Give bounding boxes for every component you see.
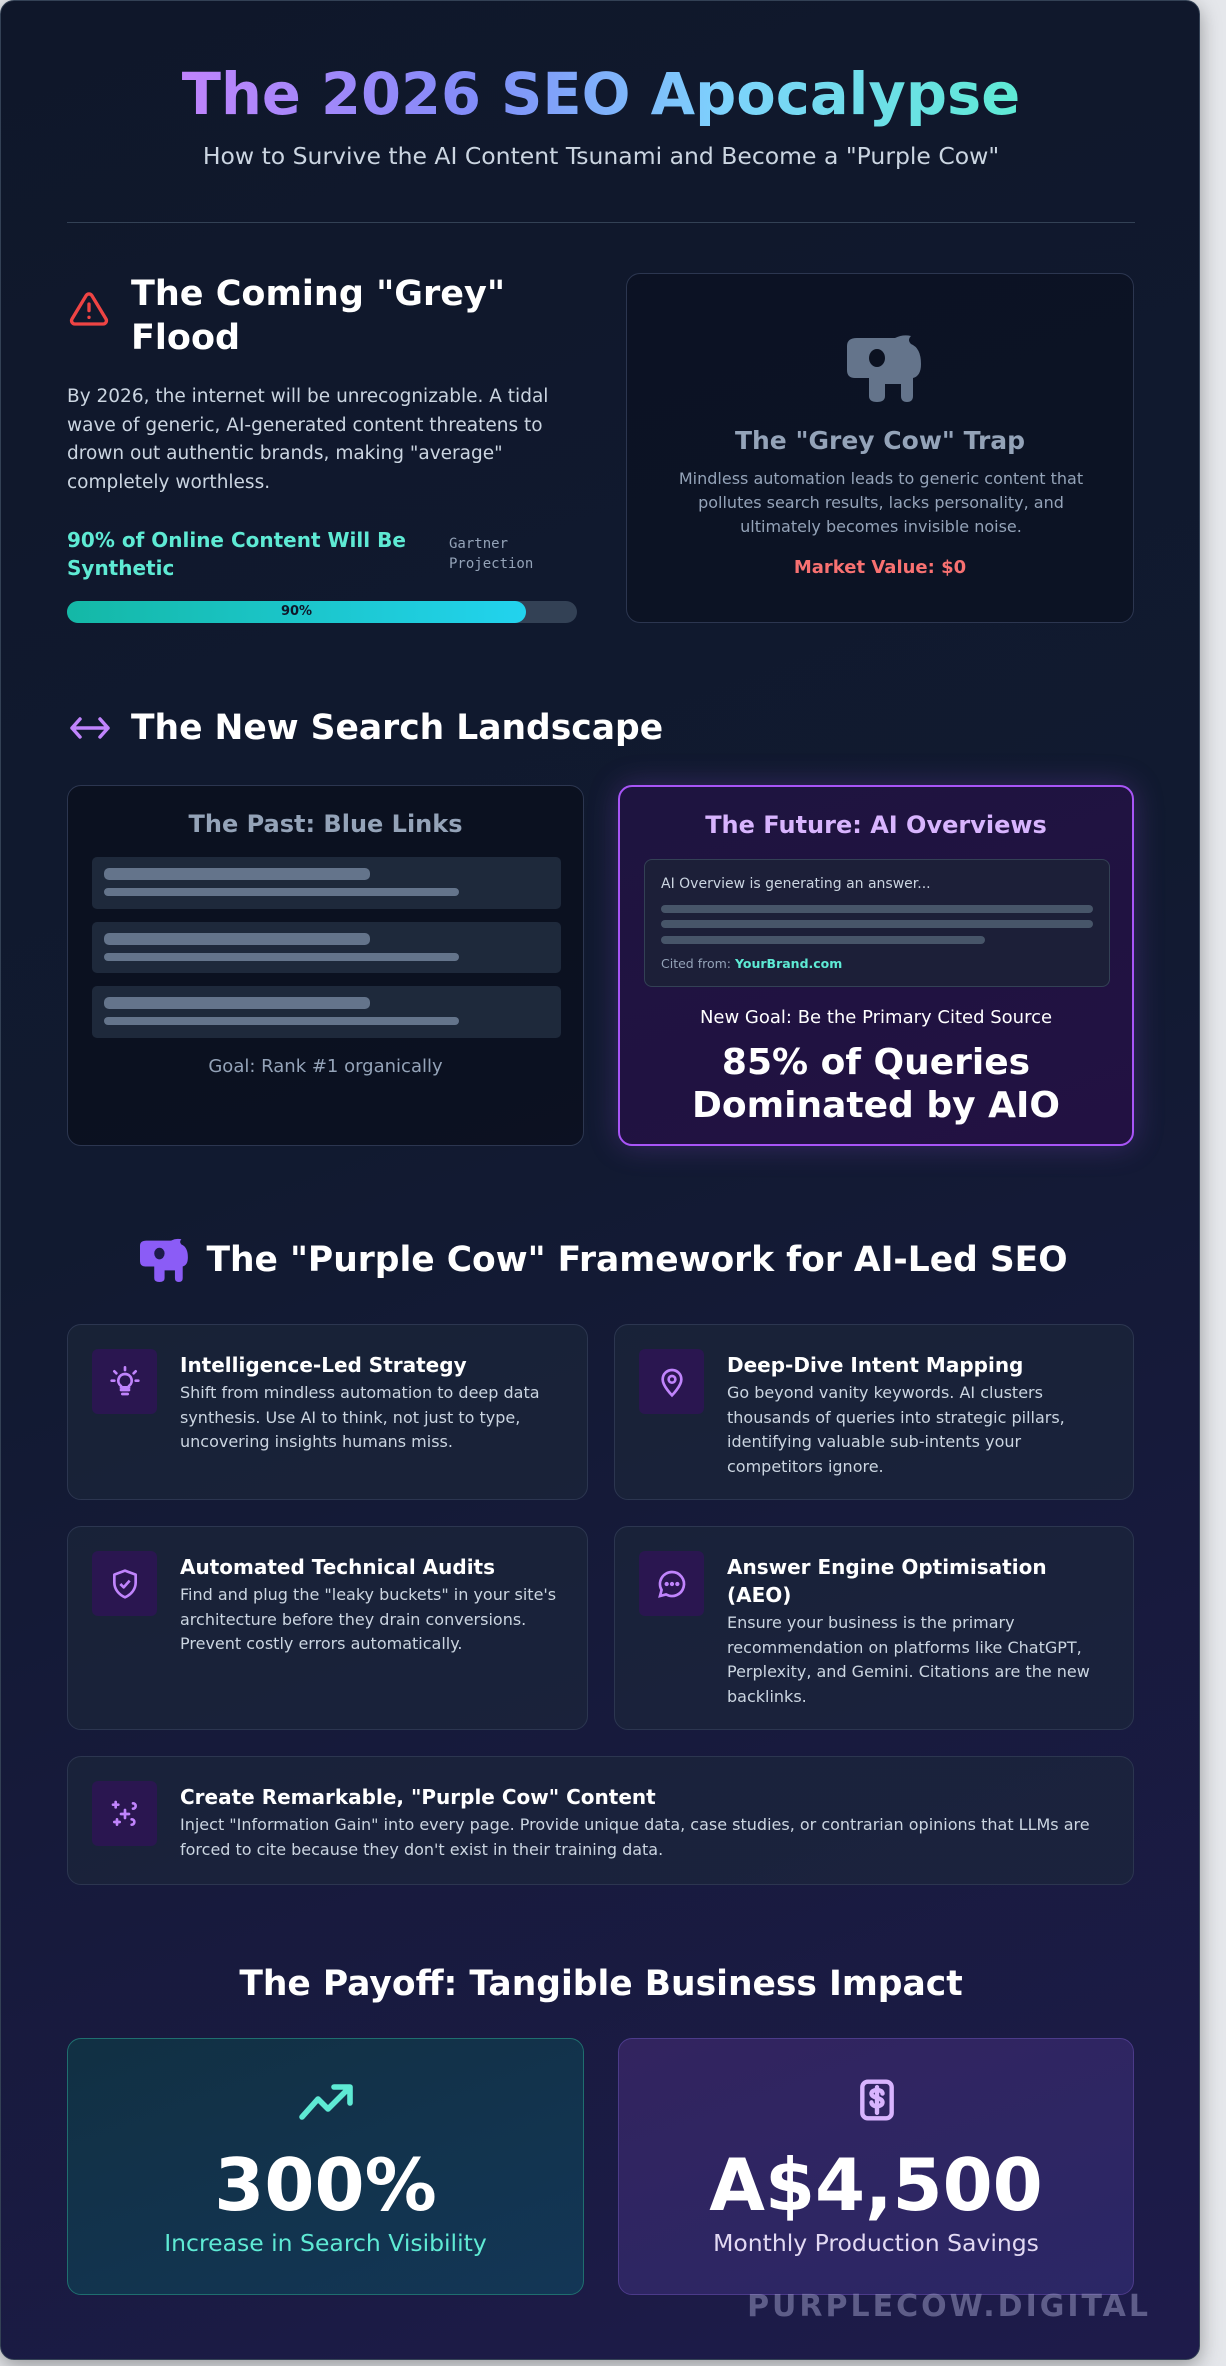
progress bar: 90% (281, 604, 312, 619)
stat card: search visibility: Increase in Search Visibility (164, 2229, 487, 2257)
card: AEO: Ensure your business is the primary recommendation on platforms like ChatGPT, Perplexity, and Gemini. Citations are the new backlinks. (727, 1613, 1090, 1706)
heading: Flood (131, 318, 240, 358)
source (449, 536, 533, 572)
card: intelligence-led strategy: Shift from mindless automation to deep data synthesis. Use AI to think, not just to type, uncovering insights humans miss. (180, 1383, 540, 1451)
stat card: savings (618, 2038, 1134, 2295)
panel: past blue links: The Past: Blue Links (188, 810, 463, 838)
icon: grey cow (847, 335, 921, 402)
description: Mindless automation leads to generic content that pollutes search results, lacks personality, and ultimately becomes invisible noise. (679, 469, 1083, 536)
icon: arrows (70, 717, 110, 739)
heading: The "Grey Cow" Trap (735, 426, 1025, 455)
card: automated technical audits: Automated Technical Audits (180, 1555, 495, 1579)
icon: warning (70, 292, 108, 326)
stat card: search visibility (67, 2038, 584, 2295)
title: The 2026 SEO Apocalypse (182, 61, 1020, 128)
paragraph: By 2026, the internet will be unrecognizable. A tidal wave of generic, AI-generated content threatens to drown out authentic brands, making "average" completely worthless. (67, 386, 548, 492)
AI overview box: Cited from: YourBrand.com (661, 956, 842, 971)
heading (131, 274, 505, 358)
card: deep-dive intent mapping (614, 1324, 1134, 1500)
panel: future AI overviews: New Goal: Be the Primary Cited Source (700, 1007, 1052, 1028)
panel: past blue links (67, 785, 584, 1146)
heading: The Coming "Grey" (131, 274, 505, 314)
section heading: search landscape: The New Search Landscape (131, 708, 663, 748)
stat card: savings: Monthly Production Savings (713, 2229, 1039, 2257)
card: remarkable content: Inject "Information Gain" into every page. Provide unique data, case studies, or contrarian opinions that LLMs are forced to cite because they don't exist in their training data. (180, 1815, 1090, 1858)
card: remarkable content (67, 1756, 1134, 1885)
section heading: purple cow framework: The "Purple Cow" Framework for AI-Led SEO (206, 1240, 1068, 1280)
card: automated technical audits: Find and plug the "leaky buckets" in your site's architecture before they drain conversions. Prevent costly errors automatically. (180, 1585, 556, 1653)
link results (92, 857, 561, 1038)
AI overview box: AI Overview is generating an answer... (661, 876, 931, 892)
subtitle: How to Survive the AI Content Tsunami and Become a "Purple Cow" (203, 142, 999, 170)
card: intelligence-led strategy (67, 1324, 588, 1500)
panel: future AI overviews (618, 785, 1134, 1146)
panel: past blue links: Goal: Rank #1 organically (208, 1056, 443, 1077)
panel: grey cow trap (626, 273, 1134, 623)
icon: trending up (299, 2084, 353, 2120)
section: grey flood (67, 274, 577, 623)
stat card: search visibility: 300% (214, 2143, 437, 2227)
card: deep-dive intent mapping: Deep-Dive Intent Mapping (727, 1353, 1023, 1377)
card: deep-dive intent mapping: Go beyond vanity keywords. AI clusters thousands of queries into strategic pillars, identifying valuable sub-intents your competitors ignore. (727, 1383, 1065, 1476)
icon: purple cow (140, 1238, 188, 1282)
card: remarkable content: Create Remarkable, "Purple Cow" Content (180, 1785, 656, 1809)
stat card: savings: A$4,500 (709, 2143, 1043, 2227)
stat: 90% of Online Content Will Be Synthetic (67, 528, 406, 580)
source: Projection (449, 556, 533, 572)
AI overview box (644, 859, 1110, 987)
panel: future AI overviews: 85% of Queries (722, 1042, 1030, 1083)
panel: future AI overviews: Dominated by AIO (692, 1085, 1060, 1126)
watermark: PURPLECOW.DIGITAL (747, 2289, 1151, 2324)
card: AEO: Answer Engine Optimisation (AEO) (727, 1555, 1047, 1607)
card: automated technical audits (67, 1526, 588, 1730)
source: Gartner (449, 536, 508, 552)
panel: future AI overviews: The Future: AI Overviews (705, 811, 1047, 839)
progress bar (67, 601, 577, 623)
heading: payoff: The Payoff: Tangible Business Impact (239, 1964, 963, 2004)
card: intelligence-led strategy: Intelligence-Led Strategy (180, 1353, 467, 1377)
card: AEO (614, 1526, 1134, 1730)
market value: Market Value: $0 (794, 557, 966, 578)
icon: dollar (860, 2080, 894, 2120)
